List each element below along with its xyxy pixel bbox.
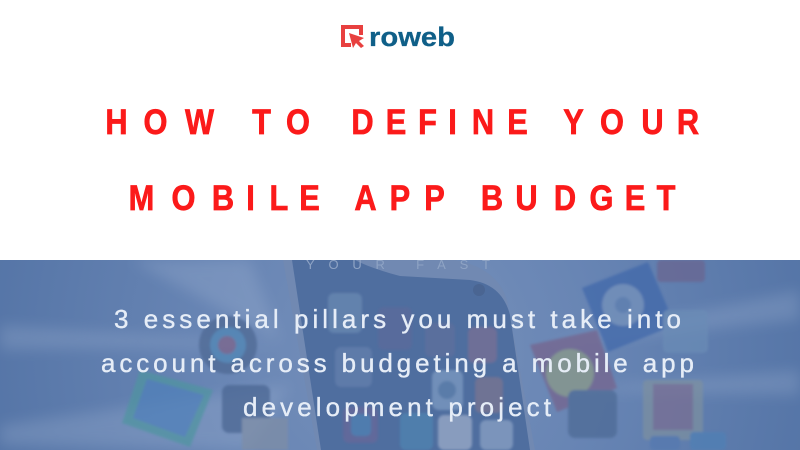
subtitle text: account across budgeting a mobile app [101,348,694,378]
title: HOW TO DEFINE YOUR [105,102,699,141]
icon: cursor square [341,25,364,48]
logo: roweb [341,22,455,52]
title [105,102,699,217]
subtitle text [101,304,694,422]
logo wordmark: roweb [369,22,455,52]
faded app icons [122,260,726,450]
faded phone [283,260,535,450]
panel: blue app background [0,257,800,450]
background light rays [0,260,800,450]
subtitle text: 3 essential pillars you must take into [114,304,681,334]
faded heading behind panel: YOUR FAST [306,257,490,272]
subtitle text: development project [243,392,552,422]
title: MOBILE APP BUDGET [129,178,675,217]
